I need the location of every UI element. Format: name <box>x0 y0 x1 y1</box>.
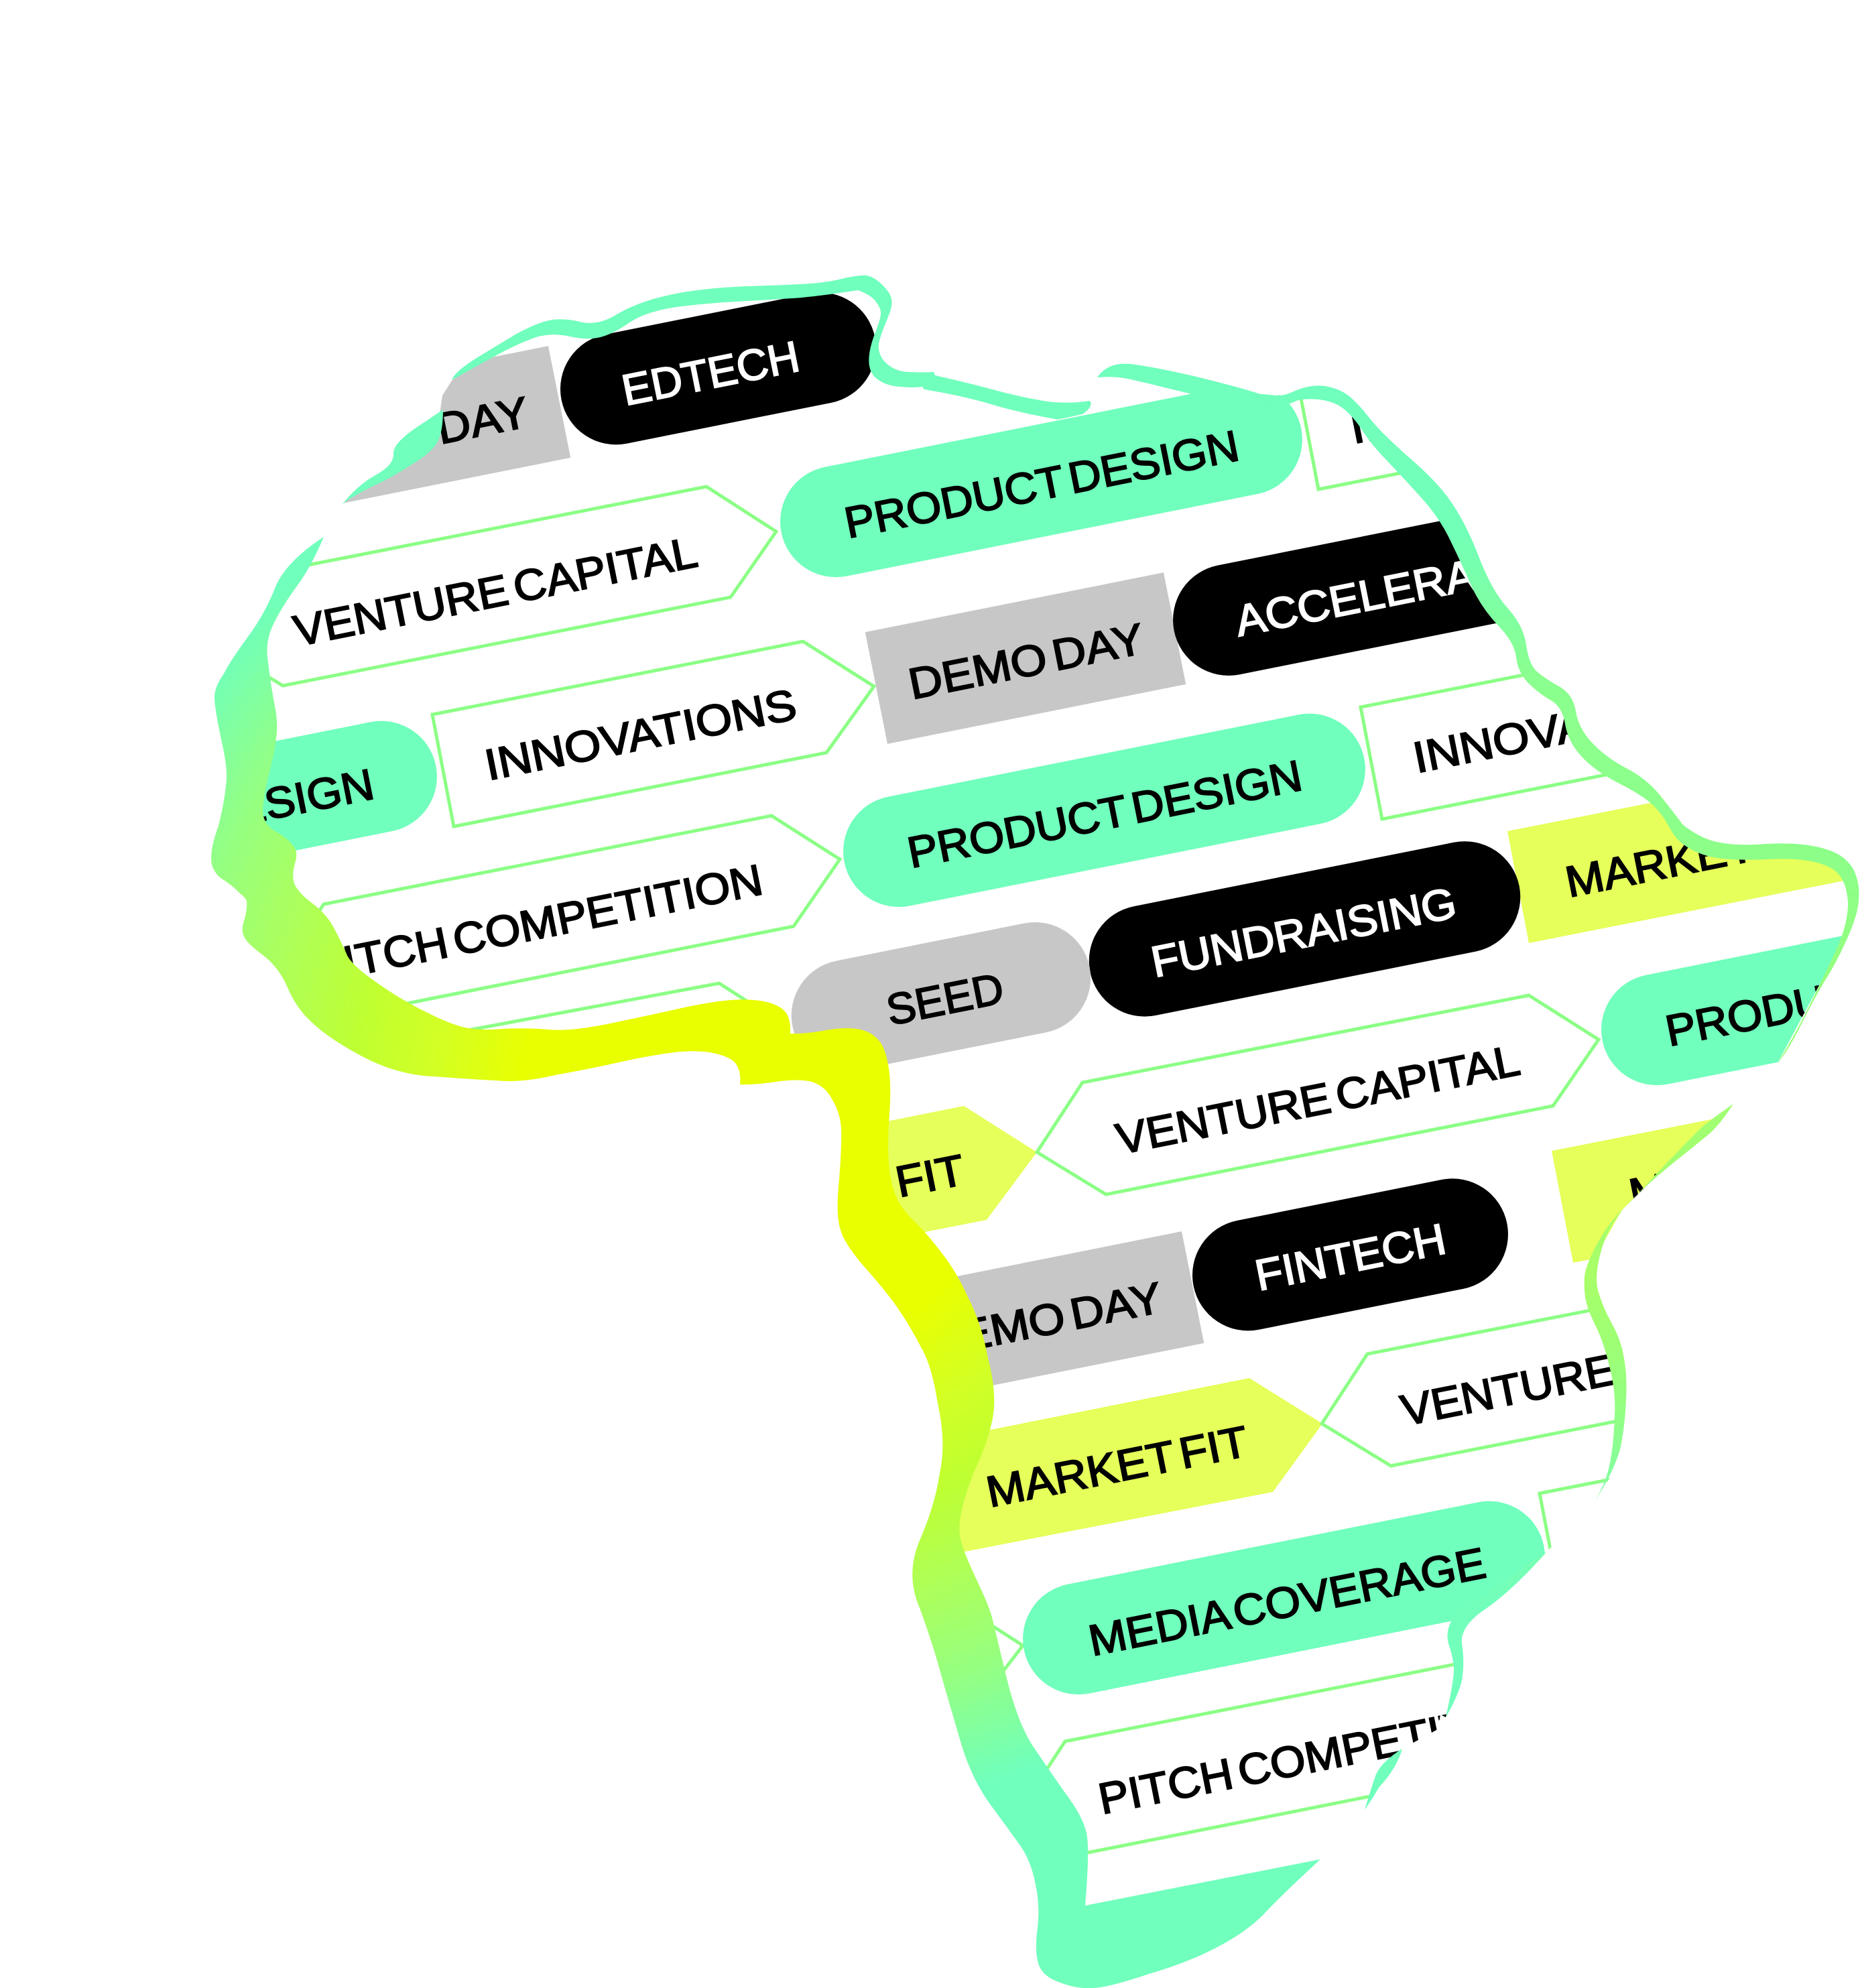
coast: north west strip <box>452 275 1091 420</box>
panel: Africa map tag content <box>0 283 1860 1853</box>
coast: south east band <box>1446 1552 1547 1717</box>
tag: FUNDRAISING <box>1079 832 1530 1026</box>
coast: north east and horn band <box>1097 364 1859 1063</box>
tag: INNOVATIONS east outline: INNOVATIONS <box>1409 672 1729 782</box>
tag: DEMO DAY north: DEMO DAY <box>289 387 533 482</box>
tag: PRODUCT DESIGN top <box>780 394 1302 578</box>
tag: INNOVATIONS east outline <box>1359 674 1607 821</box>
tag: EDTECH <box>560 294 874 445</box>
tag: PRODUCT DESIGN centre: PRODUCT DESIGN <box>904 751 1306 877</box>
coast: west and south gradient band <box>211 537 1320 1988</box>
tag: MARKET FIT east: MARKET FIT <box>1561 806 1831 907</box>
coast: north west blob <box>342 410 443 505</box>
tag: MARKET FIT south <box>761 1378 1322 1578</box>
tag: VENTURE CAPITAL outline <box>214 487 776 686</box>
tag: PRODUCT DESIGN centre <box>843 713 1365 908</box>
tag: INNOVATIONS north east outline: INNOVATIONS <box>1346 343 1664 453</box>
tag: MARKET FIT west <box>475 1106 1037 1307</box>
tag: PITCH COMPETITION outline <box>278 816 840 1015</box>
tag: FUNDRAISING: FUNDRAISING <box>1147 878 1461 987</box>
tag: VENTURE CAPITAL centre outline <box>1037 995 1599 1194</box>
tag: DEMO DAY south: DEMO DAY <box>922 1273 1166 1367</box>
tag: VENTURE CAPITAL south outline <box>1322 1267 1860 1466</box>
tag: INNOVATIONS north east outline <box>1299 399 1401 491</box>
tag: outline row clipped by coast <box>436 983 789 1036</box>
panel: Africa coastline border <box>211 275 1859 1988</box>
tag: MARKET FIT south: MARKET FIT <box>982 1416 1252 1517</box>
tag: VENTURE CAPITAL south outline: VENTURE CAPITAL <box>1397 1307 1808 1435</box>
tag: ACCELERATOR <box>1173 521 1496 676</box>
tag: DEMO DAY south <box>883 1231 1204 1403</box>
tag: SEED: SEED <box>882 963 1007 1034</box>
tag: MARKET FIT far east <box>1552 1078 1860 1263</box>
tag: DEMO DAY centre <box>865 572 1186 744</box>
tag: FINTECH <box>1182 1169 1518 1341</box>
tag: DEMO DAY centre: DEMO DAY <box>904 614 1148 708</box>
tag: PITCH COMPETITION south outline: PITCH COMPETITION <box>1095 1686 1552 1823</box>
tag: VENTURE CAPITAL centre outline: VENTURE CAPITAL <box>1112 1036 1524 1164</box>
tag: FINTECH: FINTECH <box>1251 1214 1450 1300</box>
tag: MARKET FIT east <box>1507 758 1860 943</box>
tag: SEED <box>782 912 1101 1081</box>
tag: ACCELERATOR: ACCELERATOR <box>1231 532 1569 645</box>
tag: MARKET FIT west: MARKET FIT <box>698 1145 969 1245</box>
coast: south east fragment <box>1365 1749 1402 1810</box>
tag: PRODUCT DESIGN west <box>263 721 437 851</box>
tag: MEDIA COVERAGE <box>1013 1491 1555 1704</box>
tag: outline box south east <box>1540 1420 1860 1605</box>
tag: VENTURE CAPITAL outline: VENTURE CAPITAL <box>290 527 701 656</box>
tag: INNOVATIONS outline: INNOVATIONS <box>481 680 800 790</box>
tag: EDTECH: EDTECH <box>618 332 804 415</box>
coast: east band <box>1585 1104 1733 1501</box>
tag: DEMO DAY north <box>345 346 571 503</box>
tag: outline arrow tip beside media coverage <box>953 1601 1023 1705</box>
tag: PRODUCT DESIGN east <box>1591 882 1860 1095</box>
tag: PRODUCT DESIGN top: PRODUCT DESIGN <box>841 421 1243 548</box>
tag: MEDIA COVERAGE: MEDIA COVERAGE <box>1084 1538 1490 1665</box>
tag: INNOVATIONS outline <box>432 641 874 826</box>
tag: PITCH COMPETITION outline: PITCH COMPETITION <box>310 855 767 992</box>
tag: PITCH COMPETITION south outline <box>1019 1653 1581 1853</box>
